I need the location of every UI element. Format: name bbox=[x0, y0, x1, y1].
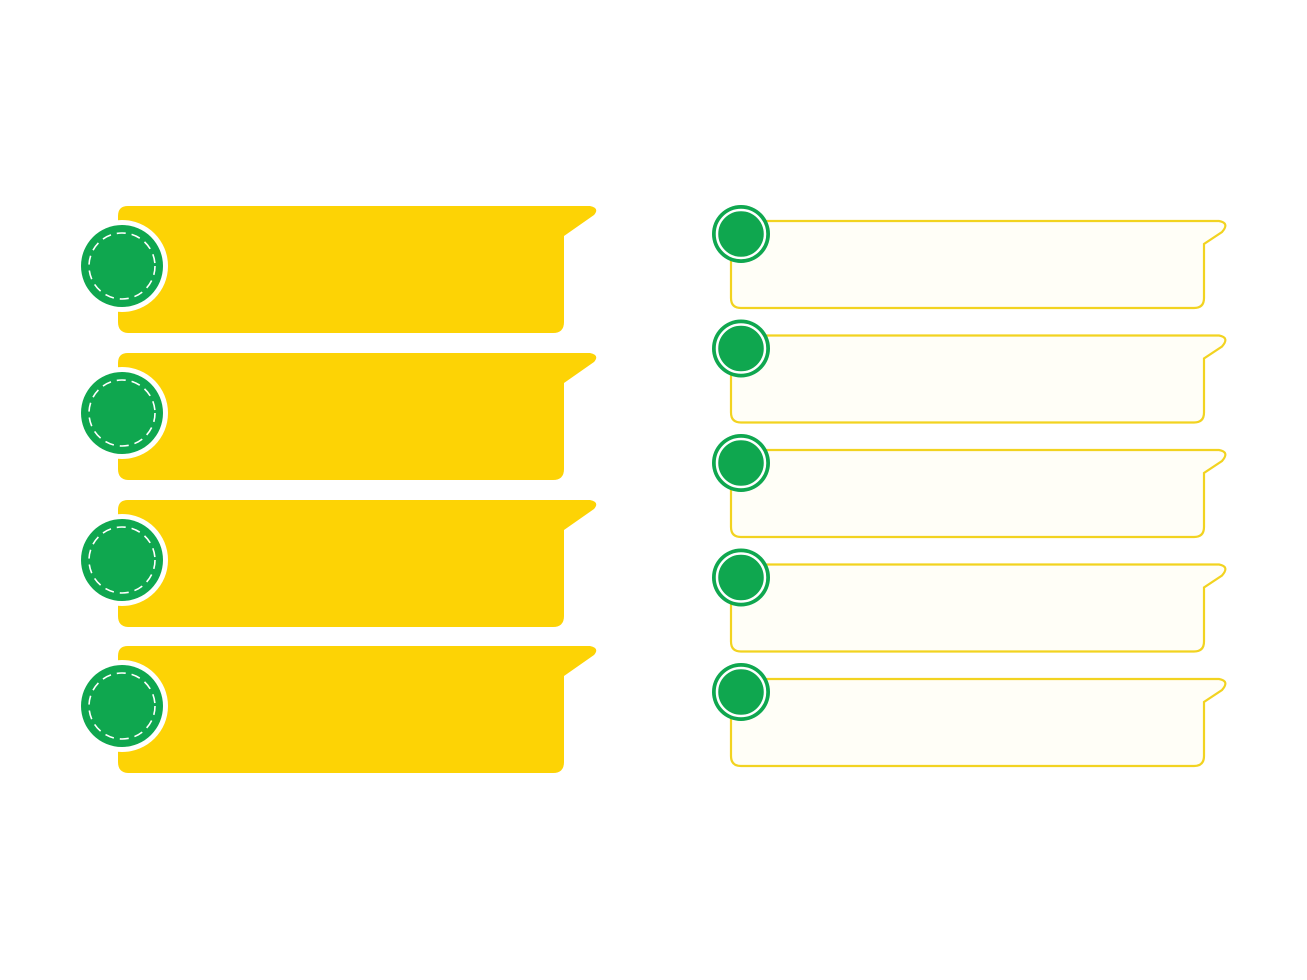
banner 1 bbox=[76, 206, 596, 333]
banner 3 bbox=[76, 500, 596, 627]
panel: left solid banners bbox=[76, 206, 596, 773]
banner 2 bbox=[76, 353, 596, 480]
outline banner 4 bbox=[712, 548, 1225, 652]
outline banner 2 bbox=[712, 320, 1225, 422]
banner 4 bbox=[76, 646, 596, 773]
outline banner 5 bbox=[712, 663, 1225, 766]
outline banner 1 bbox=[712, 205, 1225, 308]
panel: right outline banners bbox=[712, 205, 1225, 766]
outline banner 3 bbox=[712, 434, 1225, 537]
